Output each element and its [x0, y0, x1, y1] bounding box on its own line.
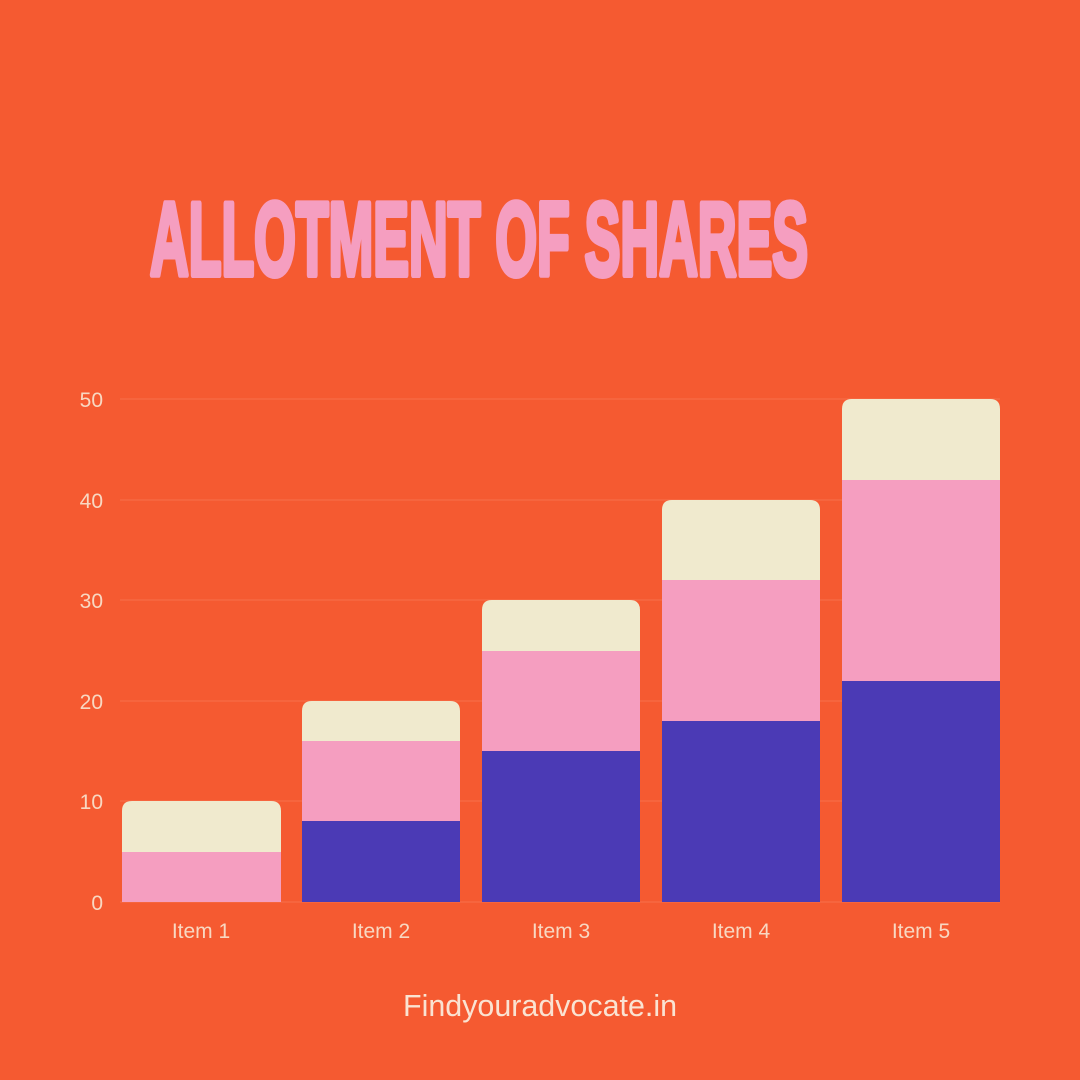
bar: Item 4 [662, 500, 820, 902]
y axis labels: 30 [80, 590, 103, 613]
y axis labels: 0 [91, 892, 103, 915]
bar: Item 3 [482, 600, 640, 902]
x axis labels: Item 4 [712, 920, 770, 943]
x axis labels: Item 5 [892, 920, 950, 943]
y axis labels: 10 [80, 791, 103, 814]
y axis labels: 40 [80, 490, 103, 513]
y axis labels: 20 [80, 691, 103, 714]
footer: Findyouradvocate.in [403, 988, 677, 1023]
bar chart [122, 399, 1000, 902]
x axis labels [172, 920, 950, 943]
bar: Item 1 [122, 801, 281, 902]
bar: Item 2 [302, 701, 460, 902]
y axis labels [80, 389, 103, 915]
x axis labels: Item 1 [172, 920, 230, 943]
x axis labels: Item 2 [352, 920, 410, 943]
bar: Item 5 [842, 399, 1000, 902]
y axis labels: 50 [80, 389, 103, 412]
x axis labels: Item 3 [532, 920, 590, 943]
